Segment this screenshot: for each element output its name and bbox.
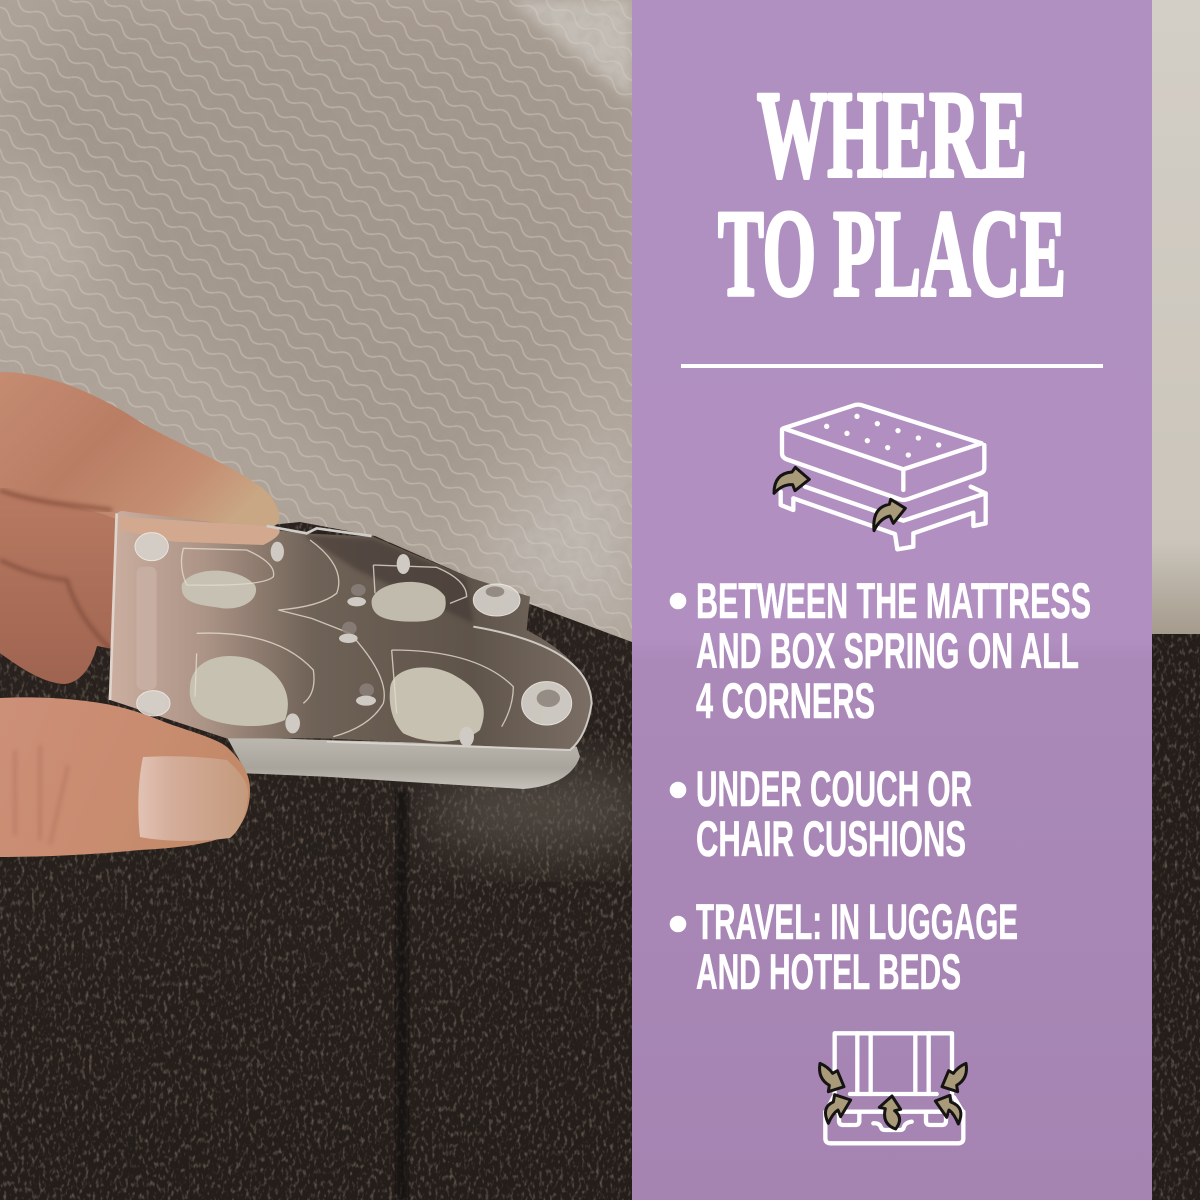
bullet: mattress [670, 573, 1091, 729]
bullet: couch: CHAIR CUSHIONS [696, 811, 966, 867]
title [718, 66, 1066, 322]
gel pad bottom right [390, 667, 484, 742]
product: clear plastic gripper clip [110, 511, 592, 789]
finger creases [0, 560, 112, 650]
index finger [0, 372, 279, 538]
embossed lettering strip [137, 567, 157, 690]
arrow: seat center [879, 1096, 901, 1129]
photo: thumb with nail [0, 697, 250, 857]
lower fingers [0, 488, 120, 684]
icon: couch with arrows [820, 1033, 966, 1143]
arrow: seat left [825, 1095, 851, 1123]
arrow: front corner [874, 499, 905, 531]
pad outlines [181, 540, 513, 737]
bullet: travel [670, 894, 1018, 1000]
gel pad bottom left [190, 656, 288, 726]
plastic posts [135, 533, 572, 725]
arrow: back right [942, 1063, 966, 1092]
arrow: seat right [935, 1095, 961, 1124]
clip rim underside [227, 737, 580, 789]
photo: gray mattress [0, 0, 632, 642]
arrow: left corner [774, 467, 809, 493]
icon: mattress on box spring with arrows [774, 405, 986, 549]
clip outline edges [327, 627, 592, 750]
bullet list [670, 573, 1091, 1000]
thumb knuckle creases [15, 745, 68, 845]
bullet: mattress: 4 CORNERS [696, 673, 875, 729]
arrow: back left [820, 1063, 844, 1092]
purple information panel [632, 0, 1152, 1200]
photo: mattress strip at right edge [1152, 0, 1200, 1200]
photo: hand fingers behind the clip [0, 372, 279, 684]
bullet: couch: UNDER COUCH OR [696, 761, 972, 817]
finger seen through clip [120, 517, 280, 545]
thumbnail [138, 756, 248, 841]
gel pad top left [182, 571, 256, 608]
gel pad top right [372, 582, 446, 622]
bullet: travel: AND HOTEL BEDS [696, 944, 961, 1000]
clip plate [110, 511, 592, 750]
bullet: couch [670, 761, 972, 867]
